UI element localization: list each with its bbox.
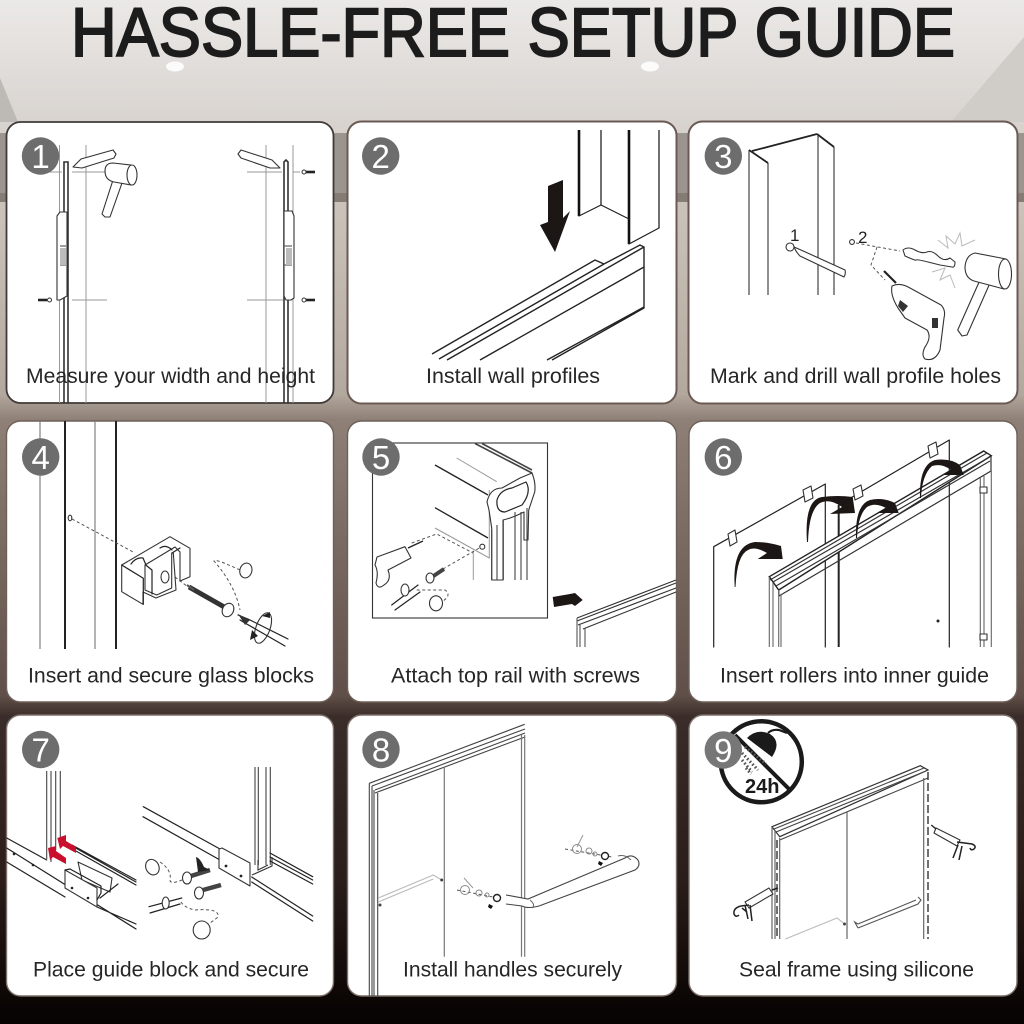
illustration: door with handle (369, 724, 639, 996)
panel: step 9 silicone (689, 715, 1017, 996)
badge: 7 (22, 731, 59, 768)
illustration: frame corner (577, 580, 676, 647)
illustration: profile with pencil, drill, anchor and hammer: 2 (858, 228, 867, 247)
badge: 5 (362, 438, 400, 476)
arrow: roller 2 (807, 496, 855, 542)
badge: 4: 4 (32, 439, 50, 476)
illustration: detail box with rail profile and tools (372, 443, 548, 618)
panel: step 3 mark and drill (688, 122, 1018, 404)
caption: step 1: Measure your width and height (26, 365, 315, 388)
caption: step 8: Install handles securely (403, 958, 622, 982)
panel: step 8 handles (348, 715, 676, 996)
illustration: wall profile and rail (432, 130, 659, 360)
panel: step 4 glass blocks (6, 421, 334, 702)
badge: 4 (22, 438, 59, 476)
badge: 6 (705, 438, 742, 476)
illustration: profile with pencil, drill, anchor and hammer: 1 (790, 226, 799, 245)
badge: 5: 5 (372, 439, 390, 476)
illustration: glass doors entering frame (714, 440, 991, 647)
badge: 1: 1 (31, 138, 50, 175)
arrow: roller 4 (920, 460, 964, 498)
caption: step 6: Insert rollers into inner guide (720, 664, 989, 688)
badge: 8: 8 (372, 732, 390, 768)
arrow: roller 3 (856, 499, 899, 538)
icon: no shower for 24 hours: 24h (745, 776, 779, 798)
badge: 6: 6 (714, 439, 732, 476)
caption: step 7: Place guide block and secure (33, 958, 309, 982)
arrow: down (540, 180, 570, 252)
illustration: guide block with screws right (143, 767, 313, 939)
badge: 3 (705, 137, 742, 175)
badge: 1 (22, 137, 59, 175)
badge: 3: 3 (714, 138, 732, 175)
illustration: profile with pencil, drill, anchor and hammer (749, 134, 1012, 360)
caption: step 5: Attach top rail with screws (391, 664, 640, 688)
panel: step 7 guide block (6, 715, 334, 996)
arrow: roller 1 (734, 542, 783, 587)
illustration: wall profile lines and marking tools (38, 145, 315, 403)
caption: step 9: Seal frame using silicone (739, 958, 974, 982)
badge: 2 (362, 137, 399, 175)
illustration: guide block placement left (7, 771, 136, 929)
badge: 7: 7 (32, 732, 50, 768)
caption: step 3: Mark and drill wall profile holes (710, 365, 1001, 388)
panel: step 1 measure (6, 122, 334, 403)
illustration: glass block assembly (40, 421, 288, 649)
badge: 9 (705, 731, 742, 769)
arrow: pointer to detail (553, 593, 583, 607)
panel: step 2 wall profiles (348, 122, 676, 404)
badge: 8 (362, 731, 400, 768)
panel: step 6 rollers (689, 421, 1017, 702)
illustration: frame with caulking guns (734, 766, 975, 939)
icon: no shower for 24 hours (721, 721, 802, 802)
caption: step 2: Install wall profiles (426, 365, 600, 388)
caption: step 4: Insert and secure glass blocks (28, 664, 314, 688)
badge: 2: 2 (372, 138, 390, 175)
badge: 9: 9 (714, 732, 732, 769)
panel: step 5 top rail (348, 421, 676, 702)
